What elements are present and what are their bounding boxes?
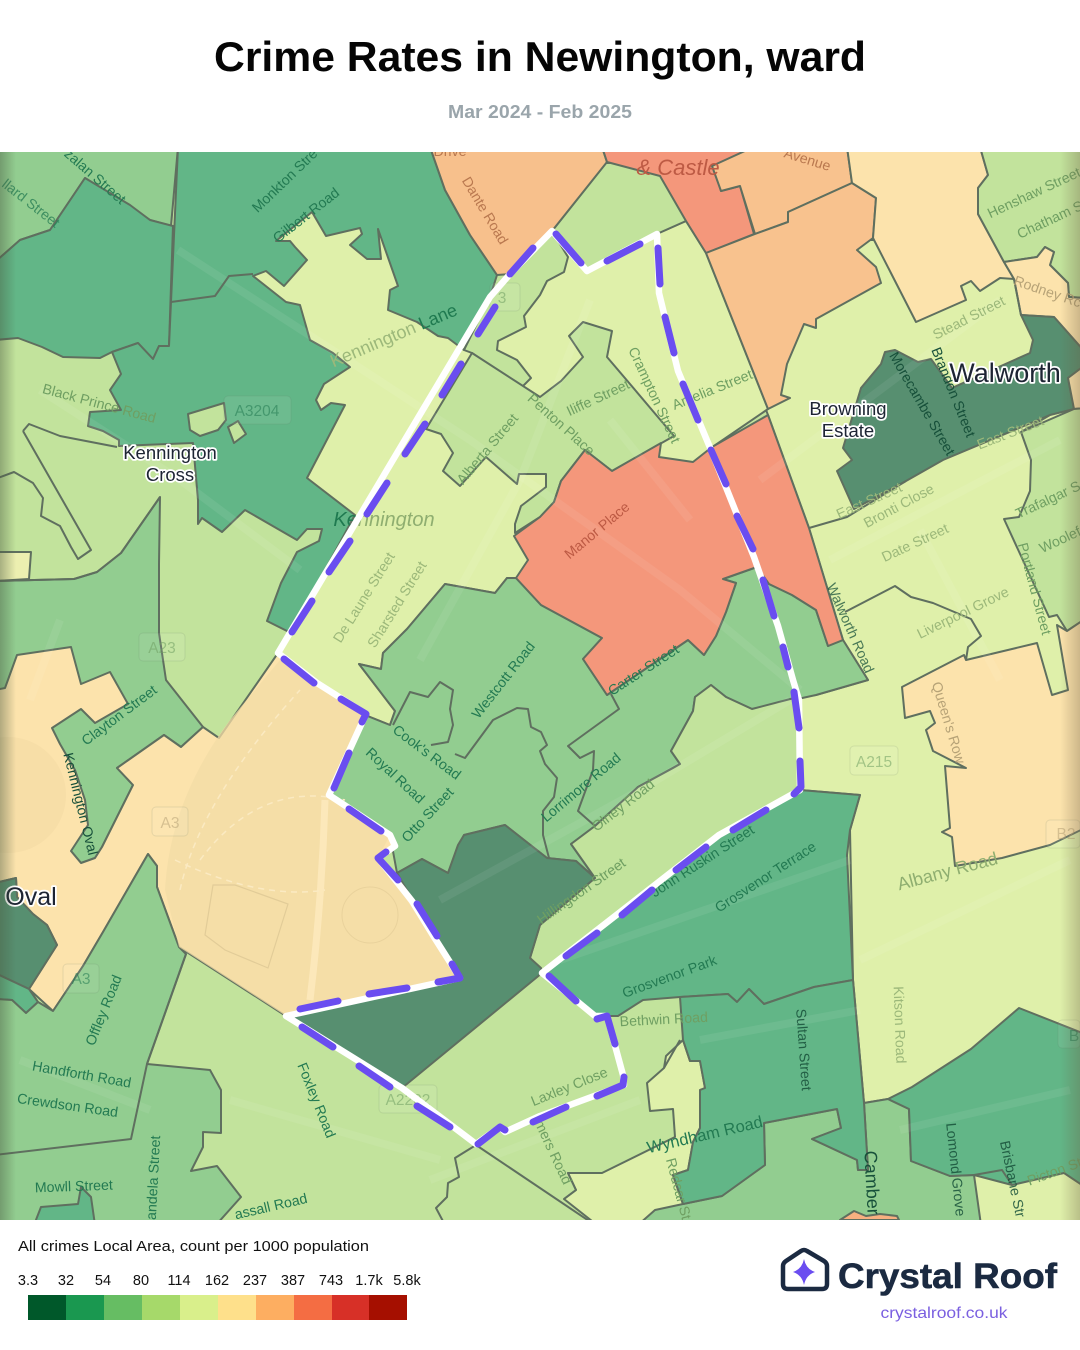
region: north Kennington green	[88, 147, 497, 633]
region: lower medium green	[638, 1099, 981, 1225]
road name labels: Grosvenor Terrace	[712, 839, 819, 916]
subtitle: date range: Mar 2024 - Feb 2025	[448, 101, 632, 122]
road name labels: Lorrimore Road	[539, 750, 624, 826]
logo: Crystal Roof	[783, 1250, 1057, 1322]
logo wordmark: Crystal Roof	[838, 1257, 1057, 1296]
legend scale values: 5.8k	[393, 1273, 421, 1289]
road name labels: Grosvenor Park	[620, 952, 720, 1002]
region: top-left green	[0, 178, 173, 359]
region: Avenue orange	[712, 147, 852, 234]
legend colour bar	[28, 1295, 407, 1320]
road name labels: Lomond Grove	[942, 1122, 968, 1217]
road number badges: 3	[498, 290, 506, 307]
road name labels: Alberta Street	[454, 411, 522, 488]
legend scale values: 3.3	[18, 1273, 38, 1289]
region: east pale	[700, 240, 1080, 1225]
legend scale values: 387	[281, 1273, 305, 1289]
road name labels: assall Road	[233, 1191, 309, 1223]
map regions: crime rate choropleth	[0, 147, 1080, 1225]
region: Trafalgar green	[1004, 408, 1080, 631]
place name labels: Oval	[5, 883, 57, 911]
region: top-left medium green	[0, 147, 178, 262]
region: Rodney cream	[1004, 247, 1080, 352]
place name labels: Cross	[146, 464, 194, 485]
region: lower-left green	[0, 497, 203, 863]
region: Elephant north green	[552, 162, 686, 271]
road name labels: zalan Street	[61, 146, 128, 208]
ward boundary: white line	[278, 231, 800, 1144]
road name labels: De Laune Street	[330, 550, 399, 646]
legend title: All crimes Local Area, count per 1000 population	[18, 1239, 369, 1255]
ward boundary: purple dashes	[284, 234, 801, 1144]
region: ward south darkest	[286, 825, 595, 1088]
road name labels: Sultan Street	[792, 1008, 814, 1091]
road name labels: Handforth Road	[31, 1058, 132, 1092]
road name labels: Foxley Road	[293, 1061, 338, 1140]
road name labels: llard Street	[0, 176, 62, 231]
legend scale values: 1.7k	[355, 1273, 383, 1289]
road number badges: A3	[161, 815, 179, 832]
place name labels: Walworth	[949, 358, 1061, 388]
road name labels: Cook's Road	[389, 722, 463, 784]
road number badges: A3204	[235, 403, 280, 420]
place name labels: Estate	[822, 420, 874, 441]
region: south-west green	[0, 854, 241, 1225]
road name labels: Brisbane Str	[996, 1139, 1028, 1219]
road name labels: Manor Place	[562, 499, 633, 563]
place name labels: Browning	[809, 398, 887, 419]
road name labels: Iliffe Street	[564, 377, 632, 420]
road name labels: & Castle	[636, 155, 720, 180]
road name labels: Kennington Oval	[59, 751, 100, 857]
internal boundaries	[0, 274, 1050, 1225]
road name labels: Albany Road	[895, 848, 1000, 894]
road name labels: Royal Road	[362, 745, 427, 807]
road name labels: Black Prince Road	[41, 381, 157, 427]
road name labels: Walworth Road	[823, 581, 877, 676]
road name labels: Clayton Street	[79, 682, 160, 749]
road name labels: Monkton Stre	[249, 146, 321, 216]
logo url: crystalroof.co.uk	[880, 1305, 1009, 1322]
region: Manor Place salmon	[514, 415, 843, 695]
road name labels: Hillingdon Street	[534, 855, 629, 928]
region: Oval green strip	[0, 973, 38, 1013]
road name labels: Redcar St	[662, 1156, 694, 1222]
road name labels: Brandon Street	[927, 345, 978, 440]
road name labels: Liverpool Grove	[915, 584, 1012, 643]
road name labels	[0, 144, 1080, 1223]
road name labels: Morecambe Street	[885, 349, 958, 459]
road name labels: Wyndham Road	[645, 1113, 764, 1157]
legend scale values: 237	[243, 1273, 267, 1289]
map edge shading	[0, 152, 1080, 1220]
legend scale values: 32	[58, 1273, 74, 1289]
road name labels: Gilbert Road	[270, 185, 343, 247]
legend scale values: 743	[319, 1273, 343, 1289]
road name labels: Penton Place	[524, 391, 597, 459]
road name labels: rmers Road	[529, 1113, 575, 1187]
road name labels: Drive	[433, 144, 467, 160]
legend scale values: 114	[167, 1273, 191, 1289]
road number badges: B2	[1057, 826, 1075, 843]
road name labels: Bronti Close	[861, 481, 937, 532]
region: Henshaw green	[978, 147, 1080, 298]
road name labels: Carter Street	[605, 642, 682, 699]
road name labels: Dante Road	[458, 174, 511, 248]
region: Wyndham pale	[564, 1040, 705, 1225]
region: Elephant and Castle salmon	[602, 147, 754, 253]
road name labels: Queen's Row	[928, 680, 968, 766]
road name labels: Offley Road	[83, 973, 126, 1048]
road name labels: Bethwin Road	[619, 1010, 708, 1030]
region: Sultan Street green	[673, 980, 868, 1204]
region: south-east green	[888, 1008, 1080, 1187]
road number badges: A215	[856, 754, 892, 771]
region: Walworth darkest	[837, 315, 1080, 509]
road name labels: Amelia Street	[670, 367, 755, 414]
legend scale values: 162	[205, 1273, 229, 1289]
road name labels: Crewdson Road	[16, 1091, 119, 1121]
region: north-east cream	[847, 147, 1014, 322]
road name labels: Mowll Street	[35, 1178, 113, 1196]
region: Mowll Street green	[34, 1187, 95, 1225]
place name labels	[5, 358, 1061, 911]
road name labels: Laxley Close	[529, 1065, 610, 1110]
region: small cream strip	[1068, 365, 1080, 409]
road number badges: A2202	[386, 1092, 430, 1109]
road name labels: Olney Road	[589, 776, 658, 835]
road name labels: Portland Street	[1014, 541, 1054, 637]
icon: house with star	[783, 1250, 827, 1289]
region: south-east cream block	[902, 619, 1080, 866]
region: Dante Road orange	[430, 147, 607, 275]
region: small bottom orange	[840, 1211, 899, 1220]
road name labels: John Ruskin Street	[648, 822, 757, 901]
road name labels: East Street	[834, 480, 905, 523]
road name labels: Sharsted Street	[365, 559, 431, 651]
road name labels: Date Street	[879, 521, 951, 566]
region: Oval darkest	[0, 878, 57, 989]
legend	[18, 1239, 421, 1320]
region: ward north-west green	[464, 231, 568, 388]
title: Crime Rates in Newington, ward	[214, 33, 866, 80]
region: Grosvenor green	[542, 790, 860, 1016]
road name labels: Kennington	[333, 509, 435, 531]
legend scale values	[18, 1273, 421, 1289]
region: Kennington pale	[253, 212, 768, 725]
region: south ward green	[329, 567, 868, 878]
place name labels: Kennington	[123, 442, 217, 463]
road name labels: Otto Street	[399, 785, 457, 846]
road number badges: A3	[72, 971, 90, 988]
region: Kennington Park and Oval cream	[0, 647, 460, 1016]
road name labels: Camber	[860, 1150, 884, 1215]
road number badges: B	[1069, 1028, 1079, 1045]
legend scale values: 80	[133, 1273, 149, 1289]
region: Alberta and Iliffe streets	[426, 322, 674, 533]
region: New Kent orange	[706, 183, 881, 409]
region: small west cream	[0, 552, 31, 581]
road name labels: Crampton Street	[624, 345, 683, 446]
road name labels: Stead Street	[930, 293, 1008, 343]
road name labels: East Street	[975, 413, 1046, 453]
parkland and road texture	[0, 250, 1070, 1180]
legend scale values: 54	[95, 1273, 111, 1289]
road name labels: Avenue	[782, 146, 832, 175]
road number badges	[63, 283, 1080, 1113]
road name labels: Kitson Road	[890, 986, 908, 1064]
road number badges: A23	[148, 640, 176, 657]
region: Olney Road green	[530, 685, 802, 973]
road name labels: Westcott Road	[469, 639, 539, 722]
road name labels: Kennington Lane	[327, 300, 460, 371]
road name labels: andela Street	[144, 1135, 164, 1220]
region: Kennington Cross islets	[188, 403, 226, 436]
